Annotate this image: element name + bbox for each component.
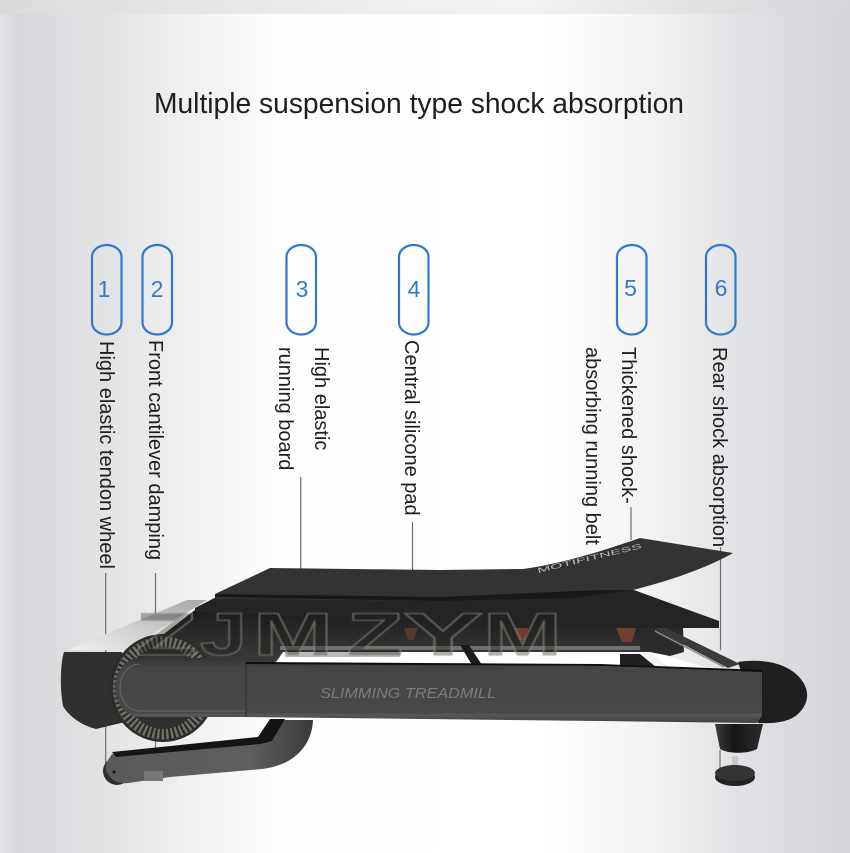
- callout 3: high elastic running board: [274, 245, 332, 470]
- rear end cap: [738, 661, 807, 723]
- rear foot: [715, 724, 763, 786]
- callout 6: rear shock absorption: Rear shock absorption: [708, 347, 730, 547]
- callout 1: high elastic tendon wheel: High elastic tendon wheel: [95, 341, 117, 569]
- callout 3: high elastic running board: 3: [296, 276, 308, 302]
- white gaps below deck: [274, 652, 708, 668]
- callout 2: front cantilever damping: Front cantilever damping: [144, 340, 166, 560]
- rear slide tube: [640, 628, 684, 656]
- watermark: M: [483, 601, 562, 668]
- callout 1: high elastic tendon wheel: [92, 245, 122, 569]
- callout 5: thickened shock-absorbing running belt: 5: [624, 275, 637, 301]
- front motor cover: [61, 652, 125, 729]
- callout 6: rear shock absorption: [706, 245, 736, 547]
- silicone pads: [404, 628, 636, 642]
- callout 5: thickened shock-absorbing running belt: absorbing running belt: [581, 347, 603, 545]
- callout 2: front cantilever damping: [142, 245, 172, 560]
- title: Multiple suspension type shock absorption: [154, 88, 684, 120]
- side rail: [115, 658, 762, 723]
- watermark: Z: [135, 601, 197, 668]
- callout 4: central silicone pad: Central silicone pad: [400, 340, 422, 516]
- callout 4: central silicone pad: 4: [408, 276, 421, 302]
- under-deck frame: [160, 610, 655, 666]
- belt branding: MOTIFITNESS: [537, 543, 643, 575]
- treadmill illustration: [61, 538, 807, 786]
- elastic tendon wheel: [110, 634, 216, 742]
- upper running belt: [215, 538, 733, 601]
- callout 5: thickened shock-absorbing running belt: Thickened shock-: [617, 347, 639, 504]
- callout 3: high elastic running board: running board: [274, 347, 296, 470]
- watermark: [135, 601, 562, 668]
- callout 5: thickened shock-absorbing running belt: [581, 245, 646, 545]
- front top plate: [68, 600, 207, 650]
- callout 6: rear shock absorption: 6: [715, 275, 727, 301]
- front folding arm with small wheel: [103, 719, 313, 785]
- watermark: M: [253, 601, 333, 668]
- support leg: [460, 645, 482, 665]
- rail lettering: SLIMMING TREADMILL: [320, 686, 496, 702]
- callout 3: high elastic running board: High elastic: [310, 347, 332, 450]
- callout 4: central silicone pad: [399, 245, 428, 516]
- leader lines: [106, 477, 720, 768]
- lower running board: [195, 590, 719, 628]
- callout 2: front cantilever damping: 2: [151, 276, 163, 302]
- watermark: Y: [403, 601, 483, 668]
- watermark: J: [200, 601, 247, 668]
- callout 1: high elastic tendon wheel: 1: [98, 276, 110, 302]
- watermark: Z: [347, 601, 403, 668]
